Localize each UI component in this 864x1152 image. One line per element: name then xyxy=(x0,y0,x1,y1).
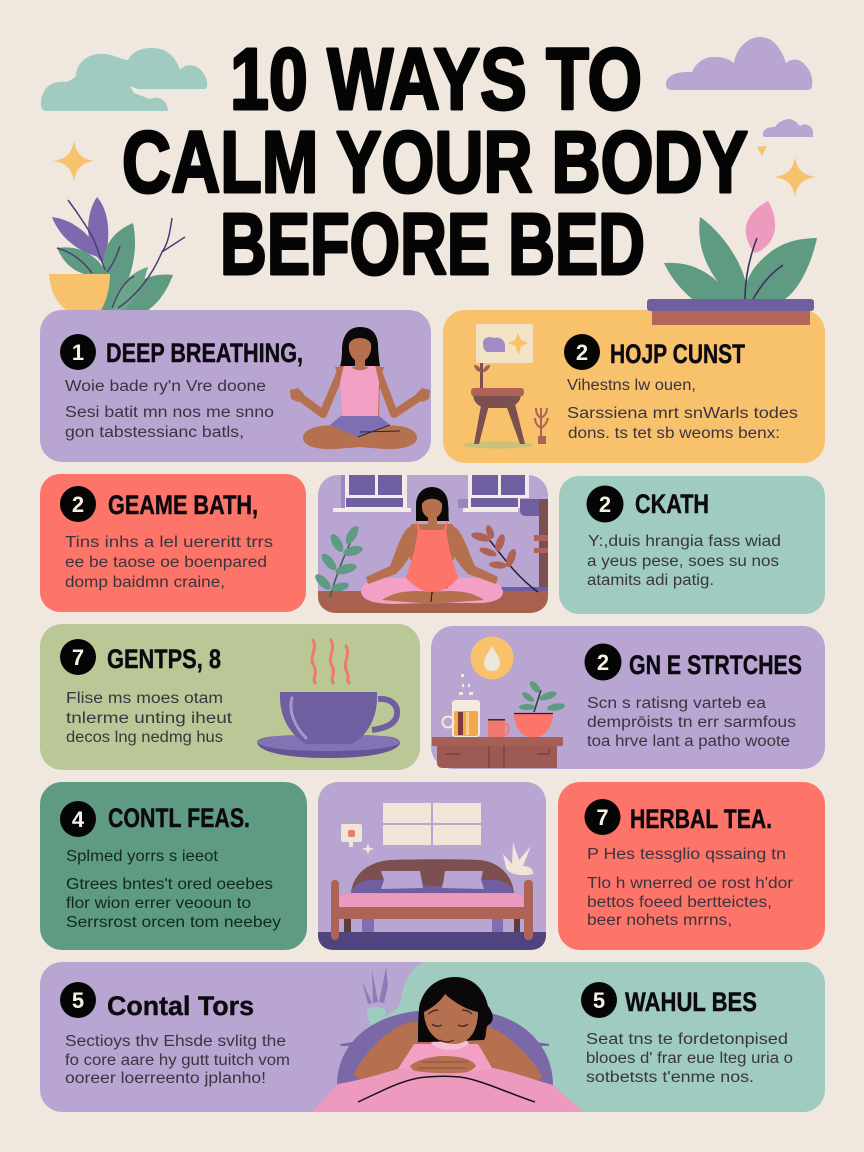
text block 2: dons. ts tet sb weoms benx: xyxy=(568,425,780,442)
text block 5 xyxy=(66,690,233,746)
icon: sleeping woman in bed xyxy=(312,968,583,1112)
title xyxy=(122,31,748,293)
heading 3: GEAME BATH, xyxy=(108,490,258,520)
text block 1 xyxy=(65,378,274,441)
heading 5: GENTPS, 8 xyxy=(107,644,221,674)
text block 5: tnlerme unting iheut xyxy=(66,710,233,727)
text block 4: atamits adi patig. xyxy=(587,572,714,589)
text block 5: decos lng nedmg hus xyxy=(66,729,223,746)
heading 8: HERBAL TEA. xyxy=(630,804,772,834)
wall lamp xyxy=(341,824,362,847)
number badge 2 xyxy=(564,334,600,370)
text block 2: Vihestns lw ouen, xyxy=(567,377,696,394)
text block 8 xyxy=(587,846,793,929)
text block 4 xyxy=(587,533,781,589)
plant right xyxy=(470,524,538,592)
panel: bottom split steps 9 and 10 xyxy=(40,962,825,1112)
title: 10 WAYS TO xyxy=(230,31,642,128)
text block 9: fo core aare hy gutt tuitch vom xyxy=(65,1052,290,1069)
number badge 8 xyxy=(584,799,620,835)
number badge 6: 2 xyxy=(597,650,609,675)
text block 7: Splmed yorrs s ieeot xyxy=(66,848,219,865)
icon: steaming cup xyxy=(257,640,400,758)
icon: teal cloud xyxy=(41,48,207,111)
heading 1: DEEP BREATHING, xyxy=(106,338,303,368)
icon: right planter with leaves xyxy=(647,201,817,325)
heading 6: GN E STRTCHES xyxy=(629,650,802,680)
number badge 10: 5 xyxy=(593,988,605,1013)
text block 5: Flise ms moes otam xyxy=(66,690,223,707)
number badge 8: 7 xyxy=(596,805,609,830)
text block 6: Scn s ratisng varteb ea xyxy=(587,695,766,712)
text block 2: Sarssiena mrt snWarls todes xyxy=(567,405,798,422)
text block 2 xyxy=(567,377,798,442)
text block 8: beer nohets mrrns, xyxy=(587,912,732,929)
panel: yoga room illustration xyxy=(313,475,548,613)
sparkle xyxy=(362,843,374,855)
icon: right sparkle xyxy=(774,157,816,197)
title: BEFORE BED xyxy=(220,196,645,293)
icon: left sparkle xyxy=(53,140,94,182)
text block 7: flor wion errer veooun to xyxy=(66,895,251,912)
text block 4: Y:,duis hrangia fass wiad xyxy=(588,533,781,550)
text block 6: toa hrve lant a patho woote xyxy=(587,733,790,750)
panel: step 6 purple with desk xyxy=(431,626,825,769)
panel: step 1 deep breathing xyxy=(40,310,431,462)
icon: stool with picture and plant xyxy=(463,324,548,448)
text block 1: Woie bade ry'n Vre doone xyxy=(65,378,266,395)
text block 10: Seat tns te fordetonpised xyxy=(586,1031,788,1048)
text block 8: Tlo h wnerred oe rost h'dor xyxy=(587,875,793,892)
panel: step 3 coral xyxy=(40,474,306,612)
panel: step 7 dark green xyxy=(40,782,307,950)
text block 10 xyxy=(586,1031,793,1086)
number badge 9: 5 xyxy=(72,988,84,1013)
text block 6: demprōists tn err sarmfous xyxy=(587,714,796,731)
number badge 3: 2 xyxy=(72,492,84,517)
text block 3: domp baidmn craine, xyxy=(65,574,225,591)
text block 7: Serrsrost orcen tom neebey xyxy=(66,914,281,931)
heading 4: CKATH xyxy=(635,489,709,519)
heading 9: Contal Tors xyxy=(107,991,254,1021)
text block 4: a yeus pese, soes su nos xyxy=(587,553,779,570)
heading 10: WAHUL BES xyxy=(625,987,757,1017)
plant left xyxy=(313,524,364,597)
heading 7: CONTL FEAS. xyxy=(108,803,250,833)
icon: small purple cloud xyxy=(763,119,813,137)
text block 7 xyxy=(66,848,281,931)
text block 1: gon tabstessianc batls, xyxy=(65,424,244,441)
text block 7: Gtrees bntes't ored oeebes xyxy=(66,876,273,893)
number badge 1: 1 xyxy=(72,340,84,365)
text block 3 xyxy=(65,534,273,591)
icon: tiny heart xyxy=(757,146,767,156)
text block 8: bettos foeed bertteictes, xyxy=(587,894,772,911)
text block 9 xyxy=(65,1033,290,1087)
panel: step 2 orange xyxy=(443,310,825,463)
number badge 2: 2 xyxy=(576,340,588,365)
panel: bedroom illustration xyxy=(318,782,546,950)
number badge 1 xyxy=(60,334,96,370)
number badge 3 xyxy=(60,486,96,522)
text block 10: blooes d' frar eue lteg uria o xyxy=(586,1050,793,1067)
panel: step 5 green with cup xyxy=(40,624,420,770)
panel: step 4 teal xyxy=(559,476,825,614)
number badge 9 xyxy=(60,982,96,1018)
number badge 4 xyxy=(586,486,624,522)
woman meditating with coral top xyxy=(361,487,503,604)
text block 3: Tins inhs a lel uereritt trrs xyxy=(65,534,273,551)
text block 9: ooreer loerreento jplanho! xyxy=(65,1070,266,1087)
number badge 5: 7 xyxy=(72,645,84,670)
panel: step 8 coral herbal tea xyxy=(558,782,825,950)
number badge 10 xyxy=(581,982,617,1018)
text block 10: sotbetsts t'enme nos. xyxy=(586,1069,754,1086)
heading 2: HOJP CUNST xyxy=(610,339,745,369)
icon: woman meditating xyxy=(290,327,430,449)
number badge 7: 4 xyxy=(72,807,85,832)
white plant xyxy=(503,842,533,875)
window xyxy=(383,803,481,845)
text block 1: Sesi batit mn nos me snno xyxy=(65,404,274,421)
text block 3: ee be taose oe boenpared xyxy=(65,554,267,571)
icon: left potted plant xyxy=(49,197,185,310)
number badge 7 xyxy=(60,801,96,837)
text block 6 xyxy=(587,695,796,750)
bed xyxy=(331,859,533,940)
text block 9: Sectioys thv Ehsde svlitg the xyxy=(65,1033,286,1050)
number badge 6 xyxy=(584,644,622,680)
number badge 5 xyxy=(60,639,96,675)
icon: nightstand with tea and plant xyxy=(432,636,565,768)
icon: purple cloud xyxy=(666,37,812,90)
text block 8: P Hes tessglio qssaing tn xyxy=(587,846,786,863)
number badge 4: 2 xyxy=(599,492,611,517)
